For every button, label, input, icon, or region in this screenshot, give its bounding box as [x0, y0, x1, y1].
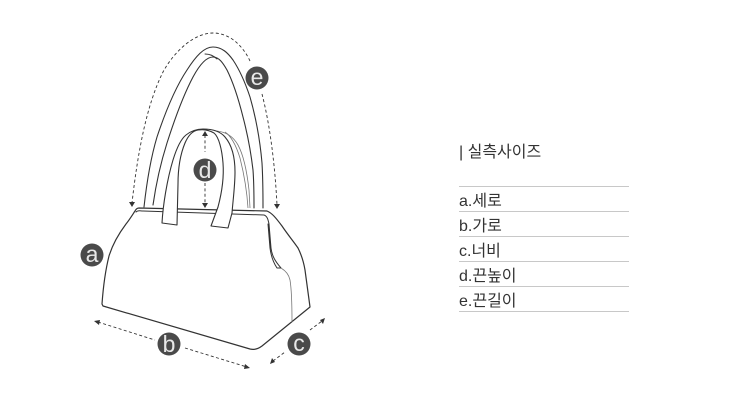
size row e: e.끈길이 [459, 293, 517, 310]
marker d [194, 157, 216, 183]
heading: | 실측사이즈 [459, 144, 541, 161]
dimension arrows [98, 33, 322, 367]
marker c [288, 330, 310, 356]
short handle back [217, 131, 250, 208]
marker e [246, 64, 268, 90]
long handle [144, 47, 263, 208]
marker a: a [86, 241, 99, 267]
marker a [80, 241, 104, 267]
size row b: b.가로 [459, 218, 502, 235]
marker d: d [199, 157, 211, 183]
short handle front [162, 129, 235, 228]
marker c: c [293, 330, 305, 356]
bag outline [102, 208, 310, 349]
bag side seam [281, 268, 292, 322]
size row d: d.끈높이 [459, 268, 517, 285]
size row a: a.세로 [459, 193, 502, 210]
arrowheads [94, 131, 325, 369]
marker b [158, 331, 180, 357]
marker b: b [163, 331, 175, 357]
marker e: e [251, 64, 263, 90]
size row c: c.너비 [459, 243, 501, 260]
